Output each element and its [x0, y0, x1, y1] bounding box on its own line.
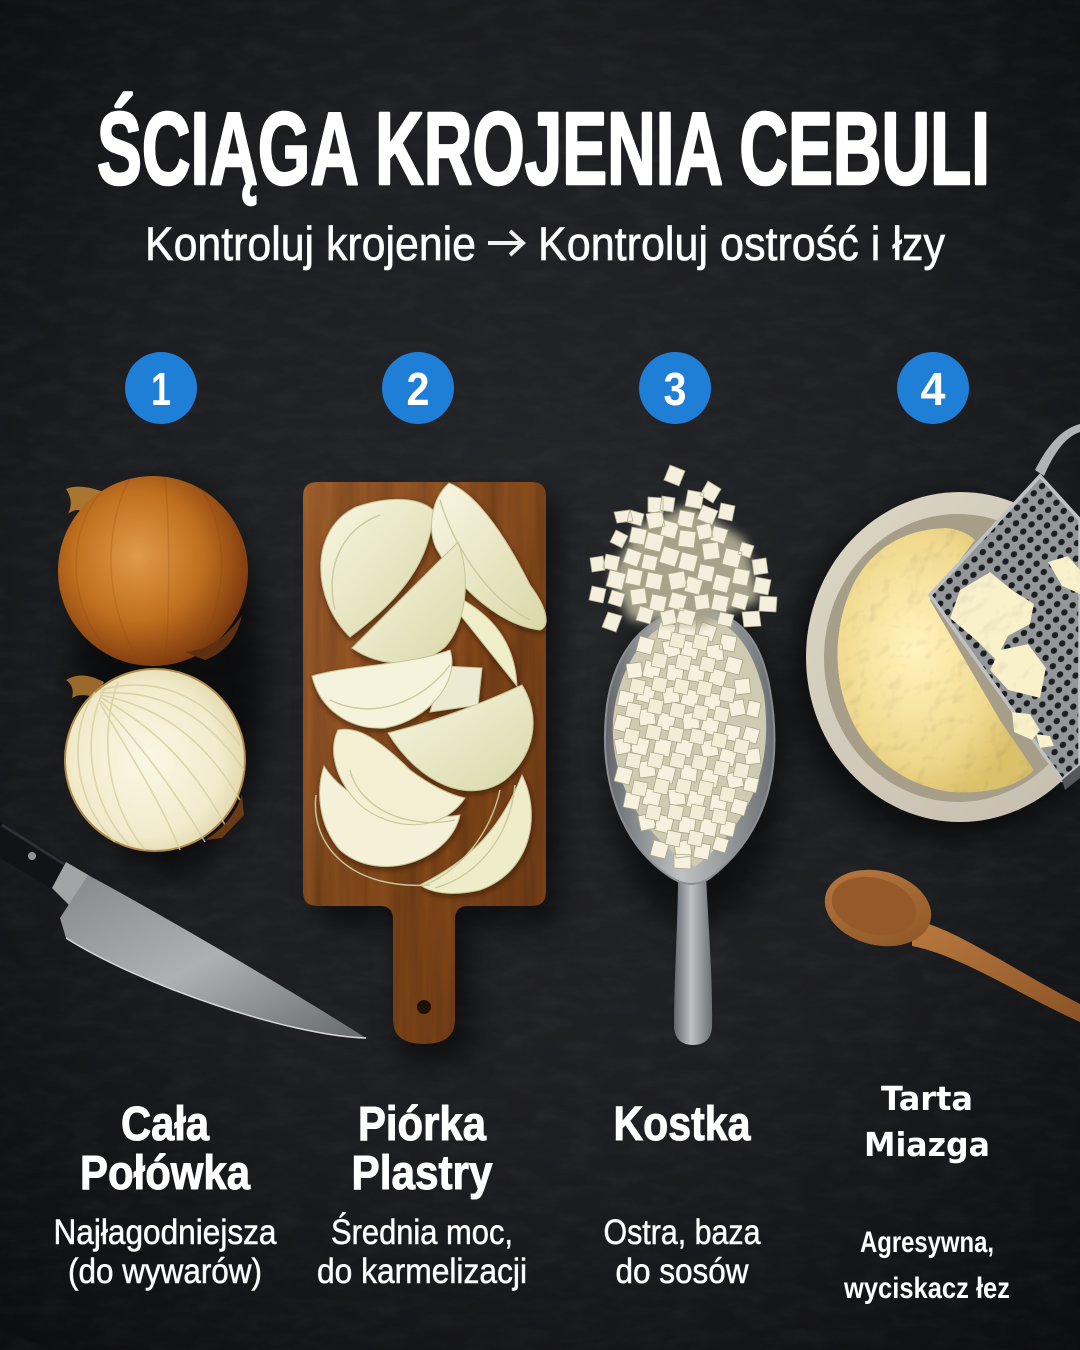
description [54, 1213, 277, 1291]
description: Ostra, baza [604, 1213, 761, 1252]
box grater [930, 424, 1080, 790]
number badge 1: 1 [151, 363, 171, 415]
heading: grated and pulp: Miazga [864, 1125, 990, 1164]
subtitle: Kontroluj ostrość i łzy [538, 217, 945, 270]
number badge 3: 3 [664, 363, 686, 415]
description: Najłagodniejsza [54, 1213, 277, 1252]
pile of diced onion [589, 465, 777, 632]
illustration: diced onion in metal scoop [589, 465, 785, 1045]
heading: whole and half [80, 1098, 250, 1200]
icon: whole onion [58, 476, 248, 666]
heading: grated and pulp [864, 1079, 990, 1164]
label: step 1 [54, 1098, 277, 1291]
description [317, 1212, 527, 1291]
number badge 4: 4 [920, 363, 946, 415]
label: step 3 [604, 1098, 761, 1291]
heading: wedges and slices [352, 1098, 493, 1200]
description: do sosów [616, 1252, 749, 1291]
heading: wedges and slices: Piórka [358, 1098, 486, 1151]
heading: dice: Kostka [614, 1098, 751, 1151]
heading: grated and pulp: Tarta [881, 1079, 973, 1118]
bowl [806, 492, 1080, 822]
number badge 2 [382, 352, 454, 424]
heading: whole and half: Połówka [80, 1147, 250, 1200]
illustration: wooden board with sliced onion [303, 482, 560, 1060]
cutting board [303, 482, 546, 1044]
label: step 4 [843, 1079, 1010, 1305]
description: (do wywarów) [68, 1252, 262, 1291]
subtitle: Kontroluj krojenie [145, 217, 476, 270]
heading: whole and half: Cała [121, 1098, 209, 1151]
icon: halved onion [65, 669, 245, 851]
number badge 1 [125, 352, 197, 424]
description [843, 1226, 1010, 1305]
subtitle [145, 217, 945, 270]
number badge 4 [897, 352, 969, 424]
number badge 3 [639, 352, 711, 424]
number badge 2: 2 [406, 363, 430, 415]
illustration: grated onion bowl with grater [790, 424, 1080, 840]
grated onion on grater [950, 556, 1080, 748]
label: step 2 [317, 1098, 527, 1291]
onion petals [312, 483, 546, 893]
illustration: chef's knife [0, 822, 366, 1038]
illustration: wooden spoon [817, 859, 1080, 1022]
description: Średnia moc, [331, 1212, 513, 1252]
scoop bowl [605, 610, 774, 884]
description: Agresywna, [860, 1226, 994, 1259]
arrow [488, 231, 523, 255]
diced onion in scoop [613, 618, 761, 869]
description [604, 1213, 761, 1291]
description: do karmelizacji [317, 1252, 527, 1291]
description: wyciskacz łez [843, 1272, 1010, 1305]
heading: wedges and slices: Plastry [352, 1147, 493, 1200]
scoop handle [674, 875, 712, 1045]
grated onion puree [837, 528, 1034, 793]
illustration: whole and halved onion [58, 476, 265, 875]
